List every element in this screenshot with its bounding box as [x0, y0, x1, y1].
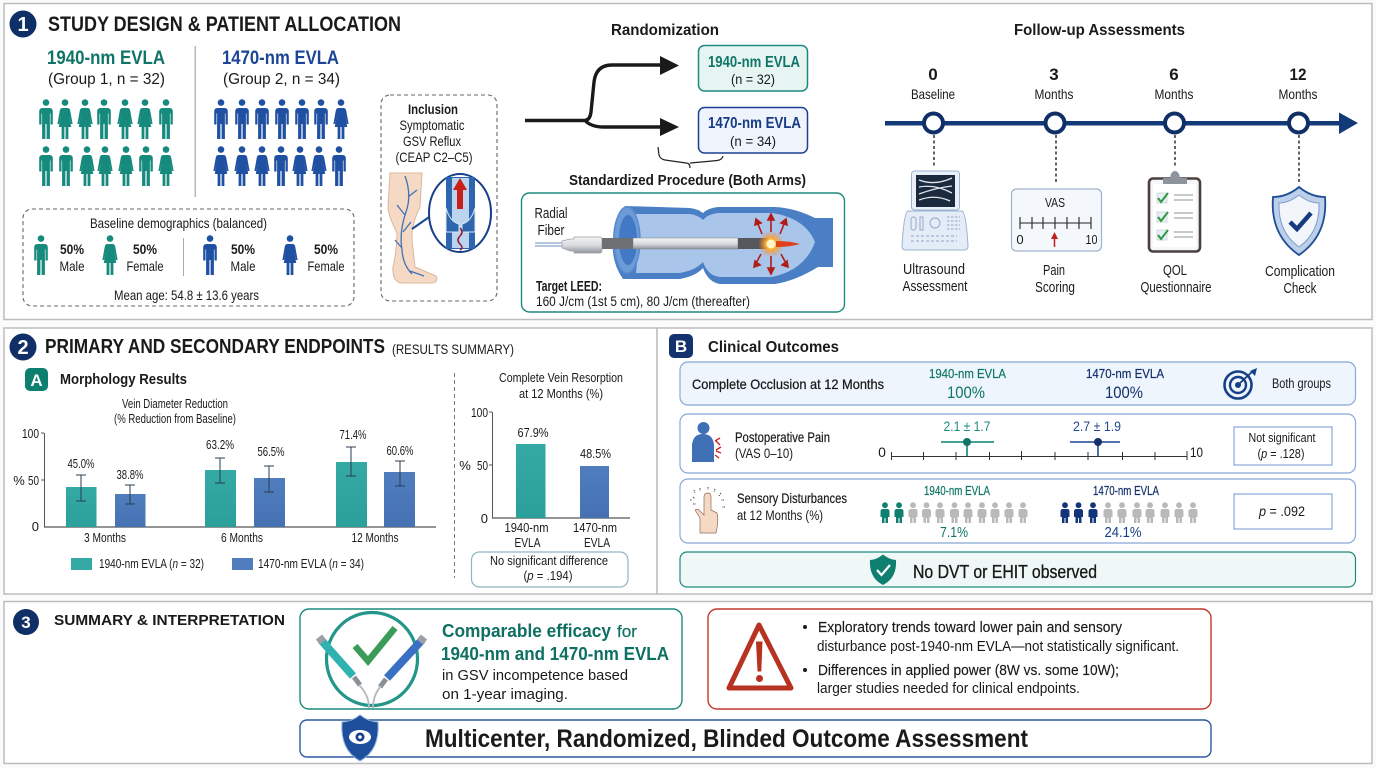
- row: sensory disturbances: 7.1%: [940, 524, 968, 541]
- p-value box: sensory: p = .092: [1258, 503, 1305, 519]
- callout: limitations: Exploratory trends toward lower pain and sensory: [818, 620, 1123, 636]
- row: complete occlusion: Both groups: [1272, 376, 1331, 391]
- group 2 heading: [222, 48, 340, 88]
- group 2 heading: (Group 2, n = 34): [223, 71, 340, 88]
- banner: no DVT or EHIT: [680, 552, 1356, 587]
- callout: comparable efficacy: for: [617, 622, 637, 641]
- heading: follow-up assessments: Follow-up Assessments: [1014, 22, 1185, 39]
- timeline assessment labels: Pain: [1043, 263, 1065, 279]
- timeline: 0: [928, 65, 938, 84]
- row: complete occlusion: 1470-nm EVLA: [1086, 366, 1164, 381]
- badge B: B: [675, 337, 687, 356]
- callout: comparable efficacy: [300, 609, 682, 709]
- badge A: A: [30, 371, 43, 390]
- icon: check with two laser fibers: [319, 612, 424, 708]
- bar chart: vein diameter reduction: 71.4%: [340, 428, 366, 442]
- panel: procedure illustration: Target LEED:: [536, 279, 602, 295]
- box: 1470 arm: 1470-nm EVLA: [708, 115, 801, 132]
- callout: limitations: larger studies needed for clinical endpoints.: [817, 681, 1080, 697]
- bar chart: complete vein resorption: Complete Vein Resorption: [499, 371, 623, 385]
- panel: procedure illustration: Fiber: [538, 223, 565, 239]
- heading: clinical outcomes: Clinical Outcomes: [708, 339, 839, 356]
- heading: standardized procedure: Standardized Procedure (Both Arms): [569, 172, 806, 189]
- group 1 heading: 1940-nm EVLA: [47, 48, 165, 69]
- panel: procedure illustration: [522, 193, 844, 312]
- timeline assessment labels: Complication: [1265, 264, 1335, 280]
- callout: comparable efficacy: in GSV incompetence based: [442, 667, 628, 684]
- icon: vein cross-section with laser fiber: [535, 206, 833, 284]
- heading: morphology results: Morphology Results: [60, 371, 187, 388]
- baseline demographics box: 50%: [60, 241, 84, 257]
- bar chart: complete vein resorption: [459, 371, 630, 550]
- chart legend: [71, 557, 364, 571]
- row: complete occlusion: [680, 362, 1356, 405]
- baseline demographics box: Female: [126, 258, 164, 274]
- badge A: [25, 368, 48, 391]
- timeline assessment labels: QOL: [1163, 263, 1187, 279]
- bar chart: vein diameter reduction: 50: [28, 473, 39, 488]
- timeline assessment labels: Questionnaire: [1140, 280, 1212, 296]
- group 1 heading: [47, 48, 165, 88]
- section 1 heading: STUDY DESIGN & PATIENT ALLOCATION: [48, 13, 401, 36]
- baseline demographics box: Male: [60, 258, 85, 274]
- timeline assessment labels: Scoring: [1035, 280, 1075, 296]
- icon: VAS pain scale card: [1012, 189, 1102, 251]
- pain scale: 0: [878, 444, 886, 460]
- panel: summary and interpretation: [4, 602, 1372, 764]
- icons: 1470 sensory pictogram: [1060, 502, 1198, 523]
- section 1 badge: 1: [17, 14, 29, 36]
- icon: QOL clipboard: [1149, 171, 1200, 252]
- inclusion criteria box: GSV Reflux: [403, 133, 461, 149]
- bar chart: complete vein resorption: 0: [481, 511, 488, 526]
- bar chart: complete vein resorption: EVLA: [514, 535, 541, 550]
- bar chart: vein diameter reduction: 12 Months: [352, 530, 399, 545]
- bar chart: vein diameter reduction: 38.8%: [116, 468, 144, 482]
- panel: study design: [4, 4, 1372, 320]
- timeline: [885, 65, 1358, 184]
- arrow: randomization split: [525, 56, 679, 136]
- pain scale: 10: [1190, 444, 1203, 460]
- bar chart: vein diameter reduction: 45.0%: [68, 457, 94, 471]
- callout: limitations: disturbance post-1940-nm EVLA—not statistically significant.: [817, 639, 1179, 655]
- baseline demographics box: [23, 209, 354, 306]
- icon: ultrasound machine: [902, 171, 968, 250]
- callout: comparable efficacy: on 1-year imaging.: [442, 686, 568, 703]
- row: postoperative pain: [680, 414, 1356, 473]
- baseline demographics box: 50%: [133, 241, 157, 257]
- badge B: [669, 334, 693, 358]
- bar chart: complete vein resorption: 1470-nm: [573, 520, 617, 535]
- section 3 heading: SUMMARY & INTERPRETATION: [54, 612, 285, 629]
- row: postoperative pain: (VAS 0–10): [735, 446, 793, 461]
- inclusion criteria box: Inclusion: [408, 101, 458, 117]
- callout: comparable efficacy: 1940-nm and 1470-nm EVLA: [441, 643, 669, 664]
- icon: vein valve magnifier: [429, 174, 491, 252]
- row: sensory disturbances: 1940-nm EVLA: [924, 484, 991, 498]
- timeline: 12: [1290, 65, 1306, 84]
- timeline: Months: [1034, 86, 1074, 102]
- icon: person with pain: [692, 422, 721, 462]
- banner: no DVT or EHIT: No DVT or EHIT observed: [913, 562, 1097, 582]
- section 3 badge: 3: [21, 613, 31, 632]
- baseline demographics box: 50%: [231, 241, 255, 257]
- section 3 badge: [13, 609, 39, 635]
- baseline demographics box: 50%: [314, 241, 338, 257]
- panel: procedure illustration: 160 J/cm (1st 5 cm), 80 J/cm (thereafter): [536, 293, 750, 309]
- timeline: 3: [1049, 65, 1059, 84]
- icon: finger with tingling: [690, 487, 725, 533]
- icon: VAS pain scale card: 0: [1016, 232, 1024, 247]
- randomization heading: Randomization: [611, 22, 719, 39]
- pain scale: [878, 418, 1203, 460]
- timeline: Months: [1278, 86, 1318, 102]
- row: sensory disturbances: 24.1%: [1104, 524, 1142, 541]
- bar chart: vein diameter reduction: Vein Diameter Reduction: [122, 397, 228, 411]
- box: 1940 arm: [698, 46, 808, 91]
- bar chart: complete vein resorption: 1940-nm: [504, 520, 548, 535]
- icon: target: [1224, 368, 1257, 398]
- icons: group 1 patients: [39, 99, 174, 186]
- section 2 badge: 2: [17, 337, 29, 359]
- section 2 heading: (RESULTS SUMMARY): [392, 342, 514, 357]
- icon: VAS pain scale card: 10: [1086, 232, 1098, 247]
- panel: procedure illustration: Radial: [534, 206, 568, 222]
- bar chart: complete vein resorption: EVLA: [584, 535, 610, 550]
- section 1 badge: [10, 10, 36, 38]
- timeline: Baseline: [911, 86, 955, 102]
- icon: eye shield: [342, 715, 378, 761]
- baseline demographics box: Male: [230, 258, 256, 274]
- icons: group 2 patients: [213, 99, 349, 186]
- bar chart: complete vein resorption: 67.9%: [518, 425, 549, 440]
- pain scale: 2.7 ± 1.9: [1073, 418, 1121, 434]
- bar chart: vein diameter reduction: 63.2%: [206, 438, 234, 452]
- bar chart: vein diameter reduction: [13, 397, 436, 571]
- timeline: 6: [1169, 65, 1179, 84]
- callout: no significant difference: [472, 552, 628, 587]
- timeline assessment labels: Check: [1284, 281, 1317, 297]
- baseline demographics box: Baseline demographics (balanced): [90, 215, 267, 231]
- row: complete occlusion: Complete Occlusion at 12 Months: [692, 376, 884, 392]
- section 2 heading: PRIMARY AND SECONDARY ENDPOINTS: [45, 336, 385, 358]
- timeline: Months: [1154, 86, 1194, 102]
- callout: no significant difference: (p = .194): [524, 568, 572, 583]
- inclusion criteria box: (CEAP C2–C5): [396, 149, 472, 165]
- bar chart: vein diameter reduction: 56.5%: [258, 445, 284, 459]
- icon: complication check shield: [1273, 187, 1325, 255]
- callout: limitations: [708, 609, 1211, 709]
- bar chart: vein diameter reduction: 3 Months: [84, 530, 126, 545]
- bar chart: vein diameter reduction: 60.6%: [386, 444, 414, 458]
- bar chart: vein diameter reduction: (% Reduction from Baseline): [114, 412, 236, 426]
- bar chart: vein diameter reduction: 0: [32, 519, 39, 534]
- row: complete occlusion: 100%: [1105, 384, 1143, 402]
- p-value box: pain: Not significant: [1248, 430, 1316, 445]
- section 2 badge: [10, 334, 36, 360]
- pain scale: 2.1 ± 1.7: [944, 418, 991, 434]
- callout: comparable efficacy: Comparable efficacy: [442, 620, 612, 641]
- row: complete occlusion: 1940-nm EVLA: [929, 366, 1006, 381]
- group 2 heading: 1470-nm EVLA: [222, 48, 339, 69]
- box: 1940 arm: 1940-nm EVLA: [708, 54, 800, 71]
- callout: no significant difference: No significant difference: [490, 553, 608, 568]
- box: 1940 arm: (n = 32): [731, 72, 775, 87]
- panel: clinical outcomes: [657, 328, 1372, 594]
- box: 1470 arm: (n = 34): [730, 134, 776, 149]
- inclusion criteria box: Symptomatic: [400, 117, 464, 133]
- bar chart: complete vein resorption: at 12 Months (%): [519, 387, 603, 401]
- banner: multicenter randomized blinded: [300, 715, 1211, 761]
- icon: warning triangle: [729, 625, 791, 688]
- p-value box: sensory: [1234, 494, 1332, 529]
- row: complete occlusion: 100%: [947, 384, 985, 402]
- icon: VAS pain scale card: VAS: [1045, 195, 1065, 210]
- bar chart: vein diameter reduction: 6 Months: [221, 530, 263, 545]
- icon: leg with varicose veins: [388, 173, 437, 283]
- p-value box: pain: (p = .128): [1258, 446, 1304, 461]
- chart legend: 1940-nm EVLA (n = 32): [99, 557, 204, 571]
- banner: multicenter randomized blinded: Multicenter, Randomized, Blinded Outcome Assessment: [425, 725, 1029, 753]
- bar chart: complete vein resorption: 50: [477, 458, 488, 473]
- baseline demographics box: Female: [308, 258, 345, 274]
- p-value box: pain: [1234, 427, 1332, 465]
- icon: green shield: [870, 554, 896, 585]
- panel: primary and secondary endpoints: [4, 328, 657, 594]
- inclusion criteria box: [381, 95, 497, 301]
- bar chart: complete vein resorption: 100: [471, 405, 488, 420]
- row: postoperative pain: Postoperative Pain: [735, 429, 830, 445]
- chart legend: 1470-nm EVLA (n = 34): [258, 557, 364, 571]
- timeline assessment labels: Assessment: [902, 279, 968, 295]
- icons: 1940 sensory pictogram: [880, 502, 1028, 523]
- callout: limitations: Differences in applied power (8W vs. some 10W);: [818, 663, 1119, 679]
- row: sensory disturbances: Sensory Disturbances: [737, 490, 847, 506]
- box: 1470 arm: [698, 108, 808, 153]
- row: sensory disturbances: 1470-nm EVLA: [1093, 484, 1160, 498]
- baseline demographics box: Mean age: 54.8 ± 13.6 years: [114, 287, 259, 303]
- bar chart: vein diameter reduction: 100: [22, 426, 39, 441]
- bar chart: vein diameter reduction: %: [13, 473, 25, 488]
- group 1 heading: (Group 1, n = 32): [48, 71, 165, 88]
- bar chart: complete vein resorption: 48.5%: [580, 446, 611, 461]
- timeline assessment labels: [902, 262, 1335, 297]
- bar chart: complete vein resorption: %: [459, 458, 471, 473]
- row: sensory disturbances: at 12 Months (%): [737, 508, 823, 523]
- row: sensory disturbances: [680, 479, 1356, 543]
- timeline assessment labels: Ultrasound: [903, 262, 965, 278]
